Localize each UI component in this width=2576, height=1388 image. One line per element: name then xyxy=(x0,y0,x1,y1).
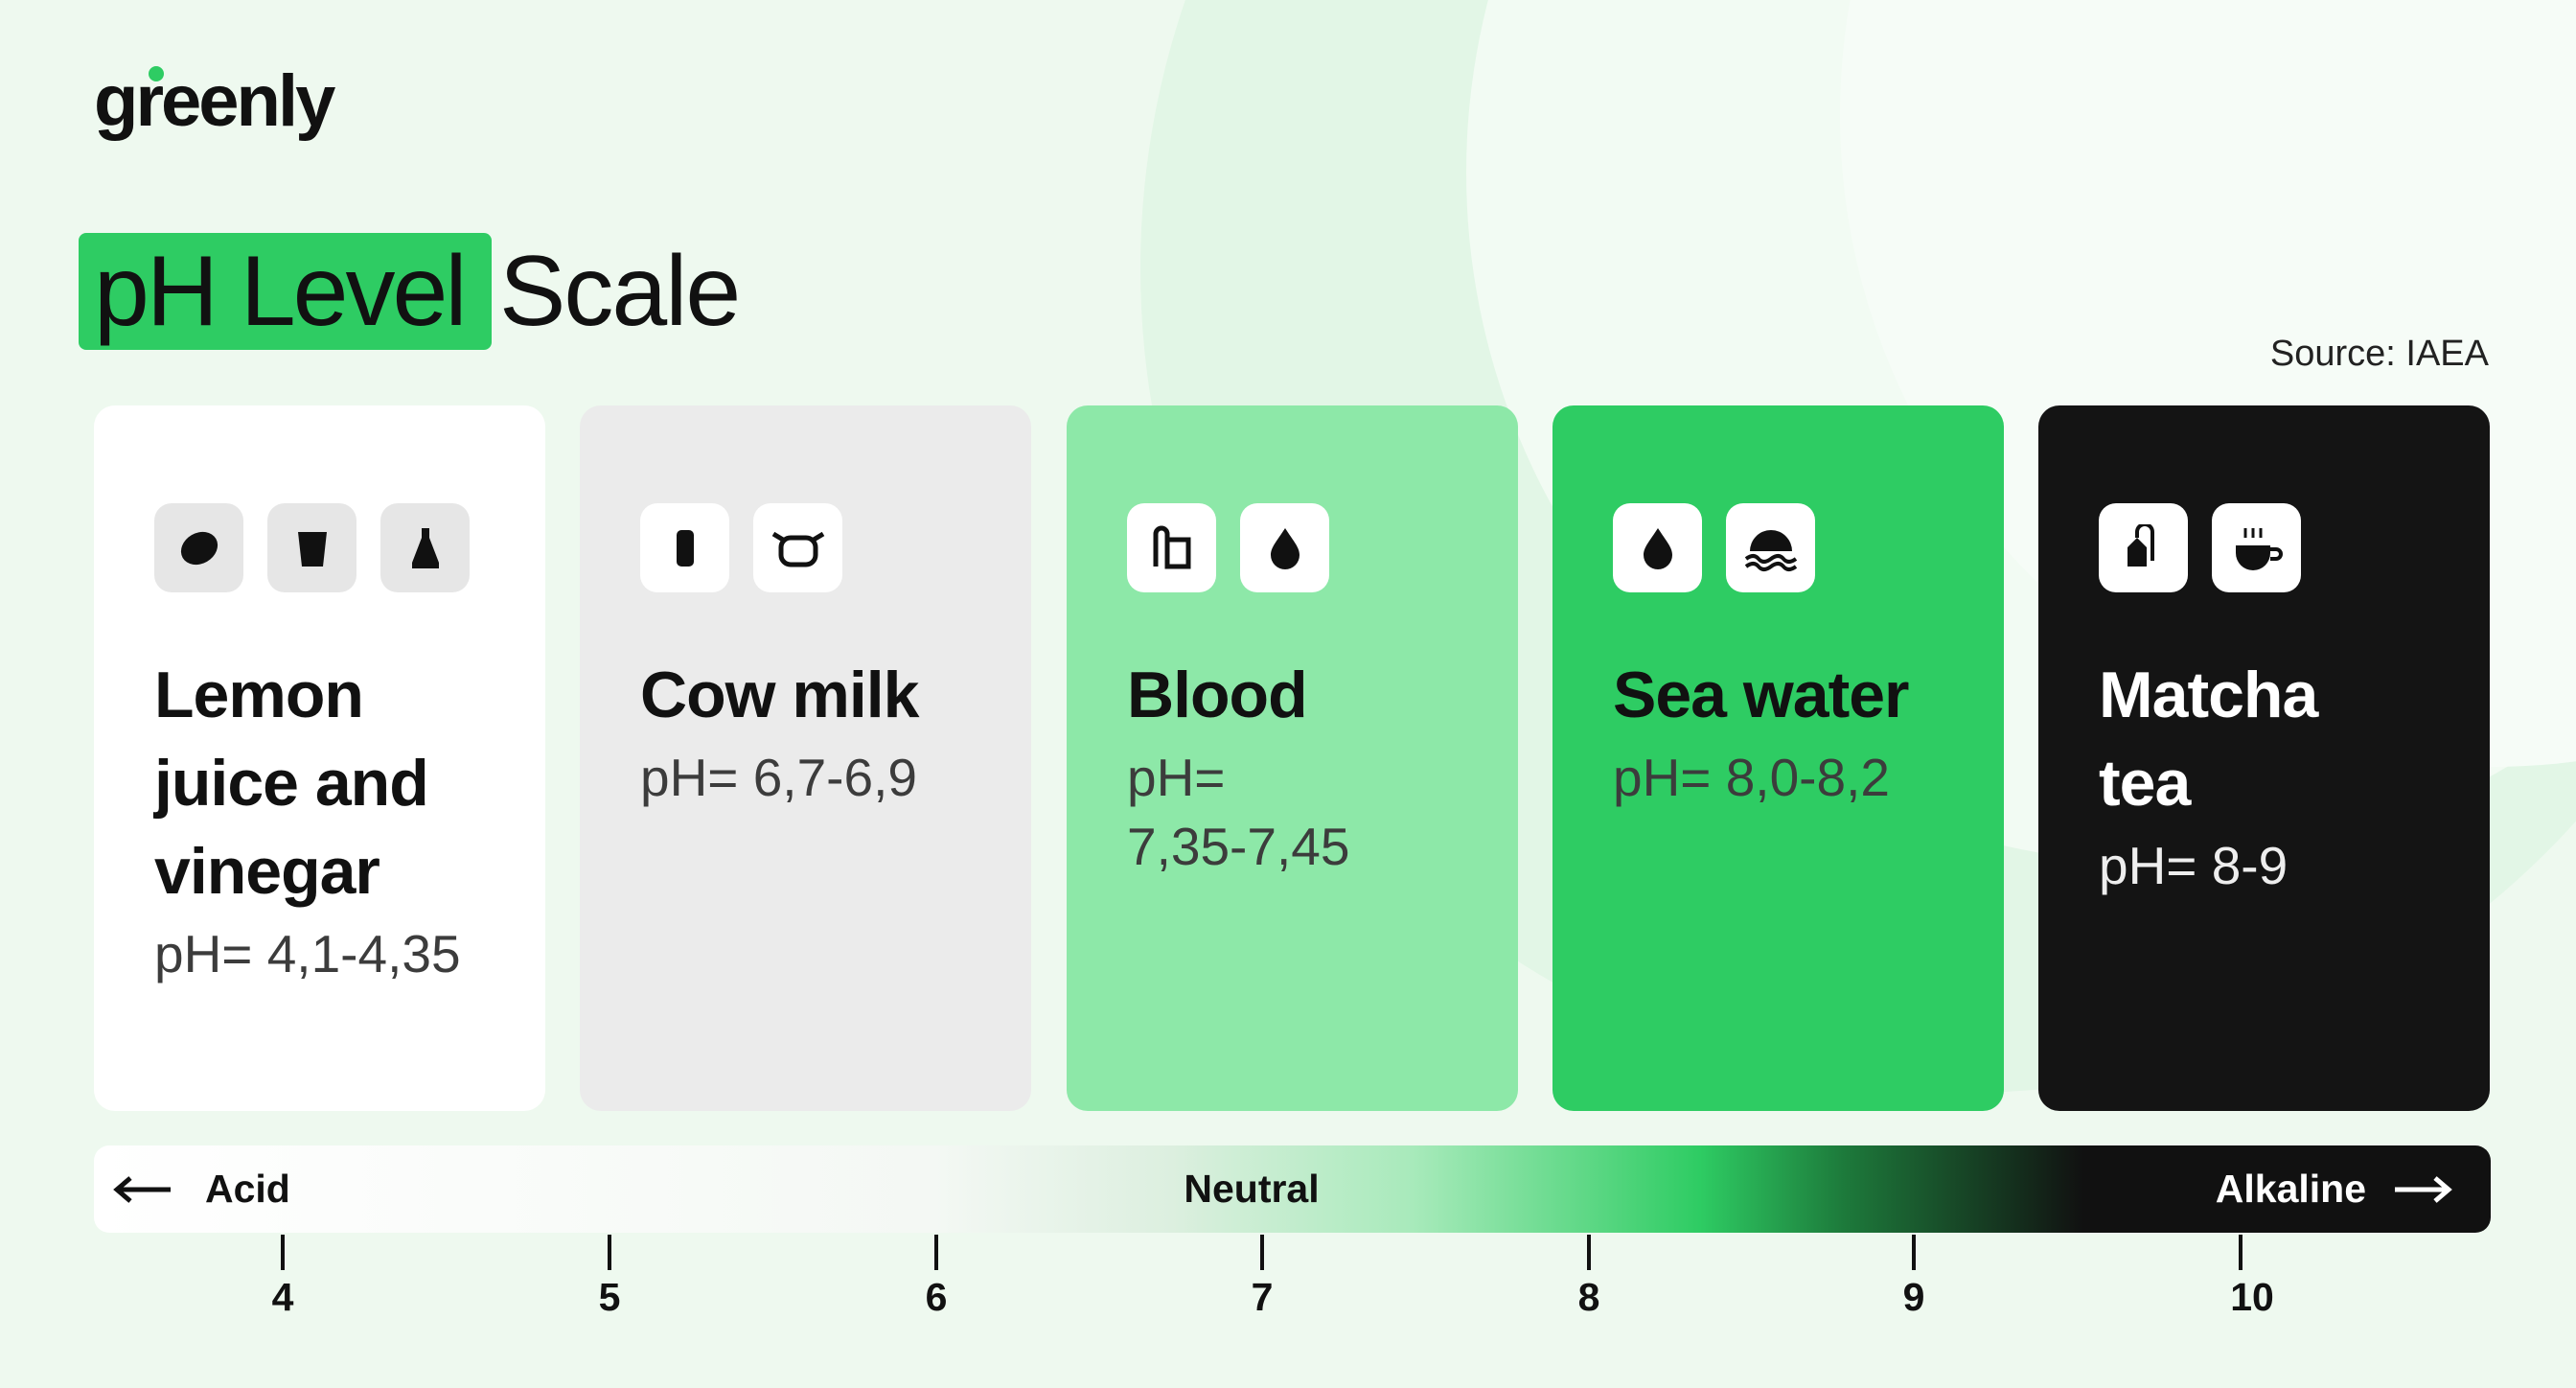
title: juice and xyxy=(154,747,428,820)
alkaline label xyxy=(2216,1167,2452,1211)
title xyxy=(153,659,461,983)
card: cow milk: pH= 6,7-6,9 xyxy=(640,748,917,807)
ticks and numbers: 7 xyxy=(1252,1275,1273,1319)
title xyxy=(79,233,739,350)
ticks and numbers: 6 xyxy=(926,1275,947,1319)
card: sea water xyxy=(1552,405,2004,1111)
card: cow milk xyxy=(580,405,1031,1111)
card: blood: 7,35-7,45 xyxy=(1127,817,1349,876)
card: sea water: pH= 8,0-8,2 xyxy=(1613,748,1890,807)
title: pH= 4,1-4,35 xyxy=(154,924,461,983)
title: Lemon xyxy=(154,659,363,731)
alkaline label: Alkaline xyxy=(2216,1167,2366,1211)
ticks and numbers: 4 xyxy=(272,1275,293,1319)
title: Scale xyxy=(499,236,739,347)
icons: lemon, cup, bottle xyxy=(154,503,470,592)
card: blood: pH= xyxy=(1127,748,1225,807)
logo: greenly xyxy=(94,60,333,142)
ticks and numbers: 9 xyxy=(1903,1275,1924,1319)
ticks and numbers: 5 xyxy=(599,1275,620,1319)
card: blood: Blood xyxy=(1127,659,1307,731)
card: cow milk: Cow milk xyxy=(640,659,918,731)
card: blood xyxy=(1067,405,1518,1111)
card: sea water: Sea water xyxy=(1613,659,1909,731)
title: pH Level xyxy=(94,236,464,347)
card: lemon xyxy=(94,405,545,1111)
card: matcha tea: Matcha xyxy=(2099,659,2317,731)
acid label xyxy=(113,1167,290,1211)
card: matcha tea: tea xyxy=(2099,747,2190,820)
ticks and numbers: 10 xyxy=(2230,1275,2274,1319)
acid label: Acid xyxy=(205,1167,290,1211)
card: matcha tea: pH= 8-9 xyxy=(2099,836,2288,895)
source: Source: IAEA xyxy=(2270,334,2489,374)
neutral label: Neutral xyxy=(1184,1167,1320,1211)
scale bar xyxy=(94,1145,2491,1233)
card: matcha tea xyxy=(2038,405,2490,1111)
ticks and numbers: 8 xyxy=(1578,1275,1599,1319)
title: vinegar xyxy=(154,835,380,908)
